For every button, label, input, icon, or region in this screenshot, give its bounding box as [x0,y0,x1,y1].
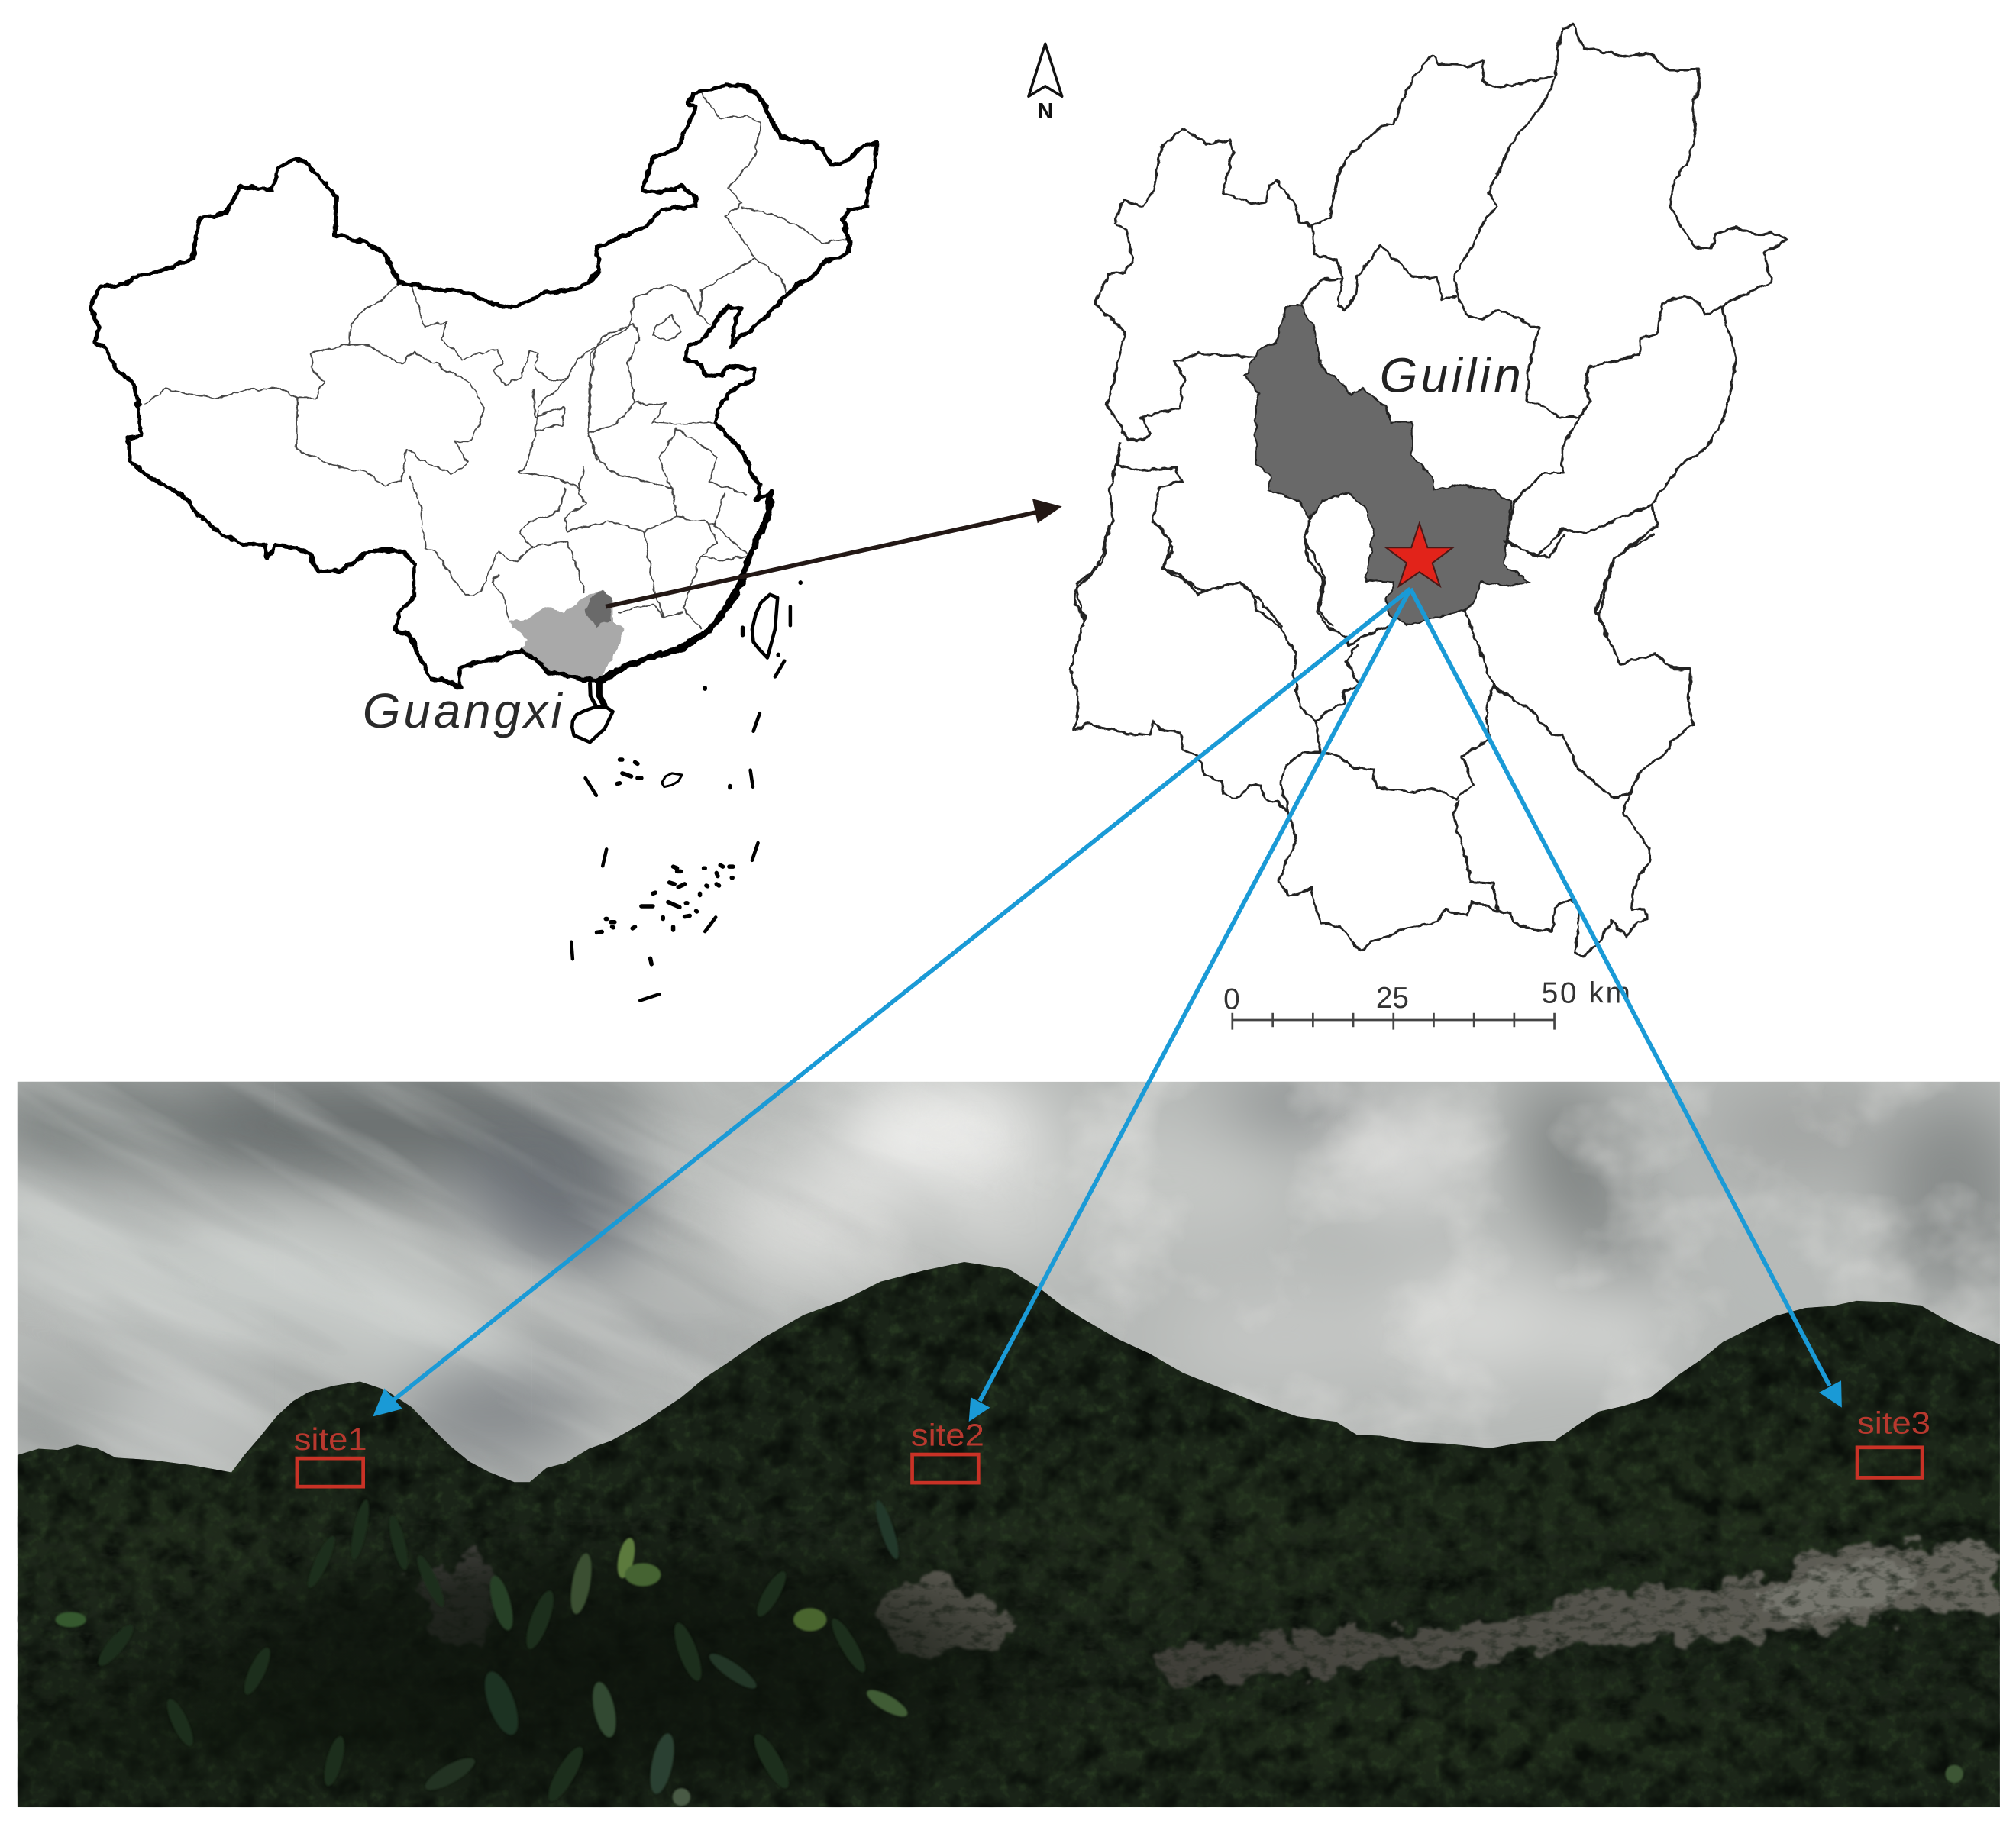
scattered reef islands [597,583,800,964]
site markers [294,1405,1930,1486]
upper boundary lines [1077,25,1788,626]
Hainan island [572,707,613,742]
nine-dash line segments [571,606,790,1000]
scale bar labels: 25 [1376,982,1409,1015]
Guilin locator fill [586,589,612,627]
arrow to site 3 [1410,589,1842,1408]
Dongsha reef ring [662,773,682,787]
icon: north arrow: N [1037,99,1053,124]
photo foreground shrubs and leaves [0,1498,1963,1819]
upper county boundaries [1077,25,1788,626]
photo hills silhouette [0,1234,2016,1825]
label: Guangxi: Guangxi [363,683,564,738]
scale bar labels: 0 [1223,983,1240,1016]
scale bar labels: 50 km [1542,976,1630,1009]
arrow: China locator to Guilin map [606,499,1062,607]
Qiongzhou strait lines [590,683,596,705]
panel: landscape photograph of the three karst hills [0,961,2016,1825]
map: China with provinces [91,86,877,688]
photo sky with clouds [17,1081,2000,1506]
arrow to site 2 [969,589,1410,1422]
scale bar ruler [1233,1013,1555,1030]
highlighted dark county [1245,305,1530,625]
China national border [91,86,877,688]
site 2 marker: site2 [911,1417,984,1452]
map: Guilin counties [1070,25,1788,957]
thick southern coastline [599,492,771,681]
cloud streak textures [18,1082,802,1482]
site 1 marker [294,1422,367,1486]
arrow to site 1 [373,589,1410,1416]
site 2 marker [911,1417,984,1483]
scale bar labels [1223,976,1630,1016]
label: Guilin: Guilin [1380,348,1521,403]
site 3 marker [1857,1405,1930,1477]
Taiwan island [752,595,777,658]
province boundaries [144,94,848,628]
icon: red star marking Guilin city [1386,523,1453,586]
photo exposed limestone rock bands [0,1517,2016,1722]
site 1 marker: site1 [294,1422,367,1457]
scale bar [1223,976,1630,1030]
lower county boundaries [1070,534,1692,957]
site 3 marker: site3 [1857,1405,1930,1440]
Guangxi province fill [509,589,623,679]
blue arrows from Guilin to the sites [373,589,1842,1422]
South China Sea: Hainan, Taiwan and islands [571,583,800,1000]
icon: north arrow [1029,44,1062,124]
